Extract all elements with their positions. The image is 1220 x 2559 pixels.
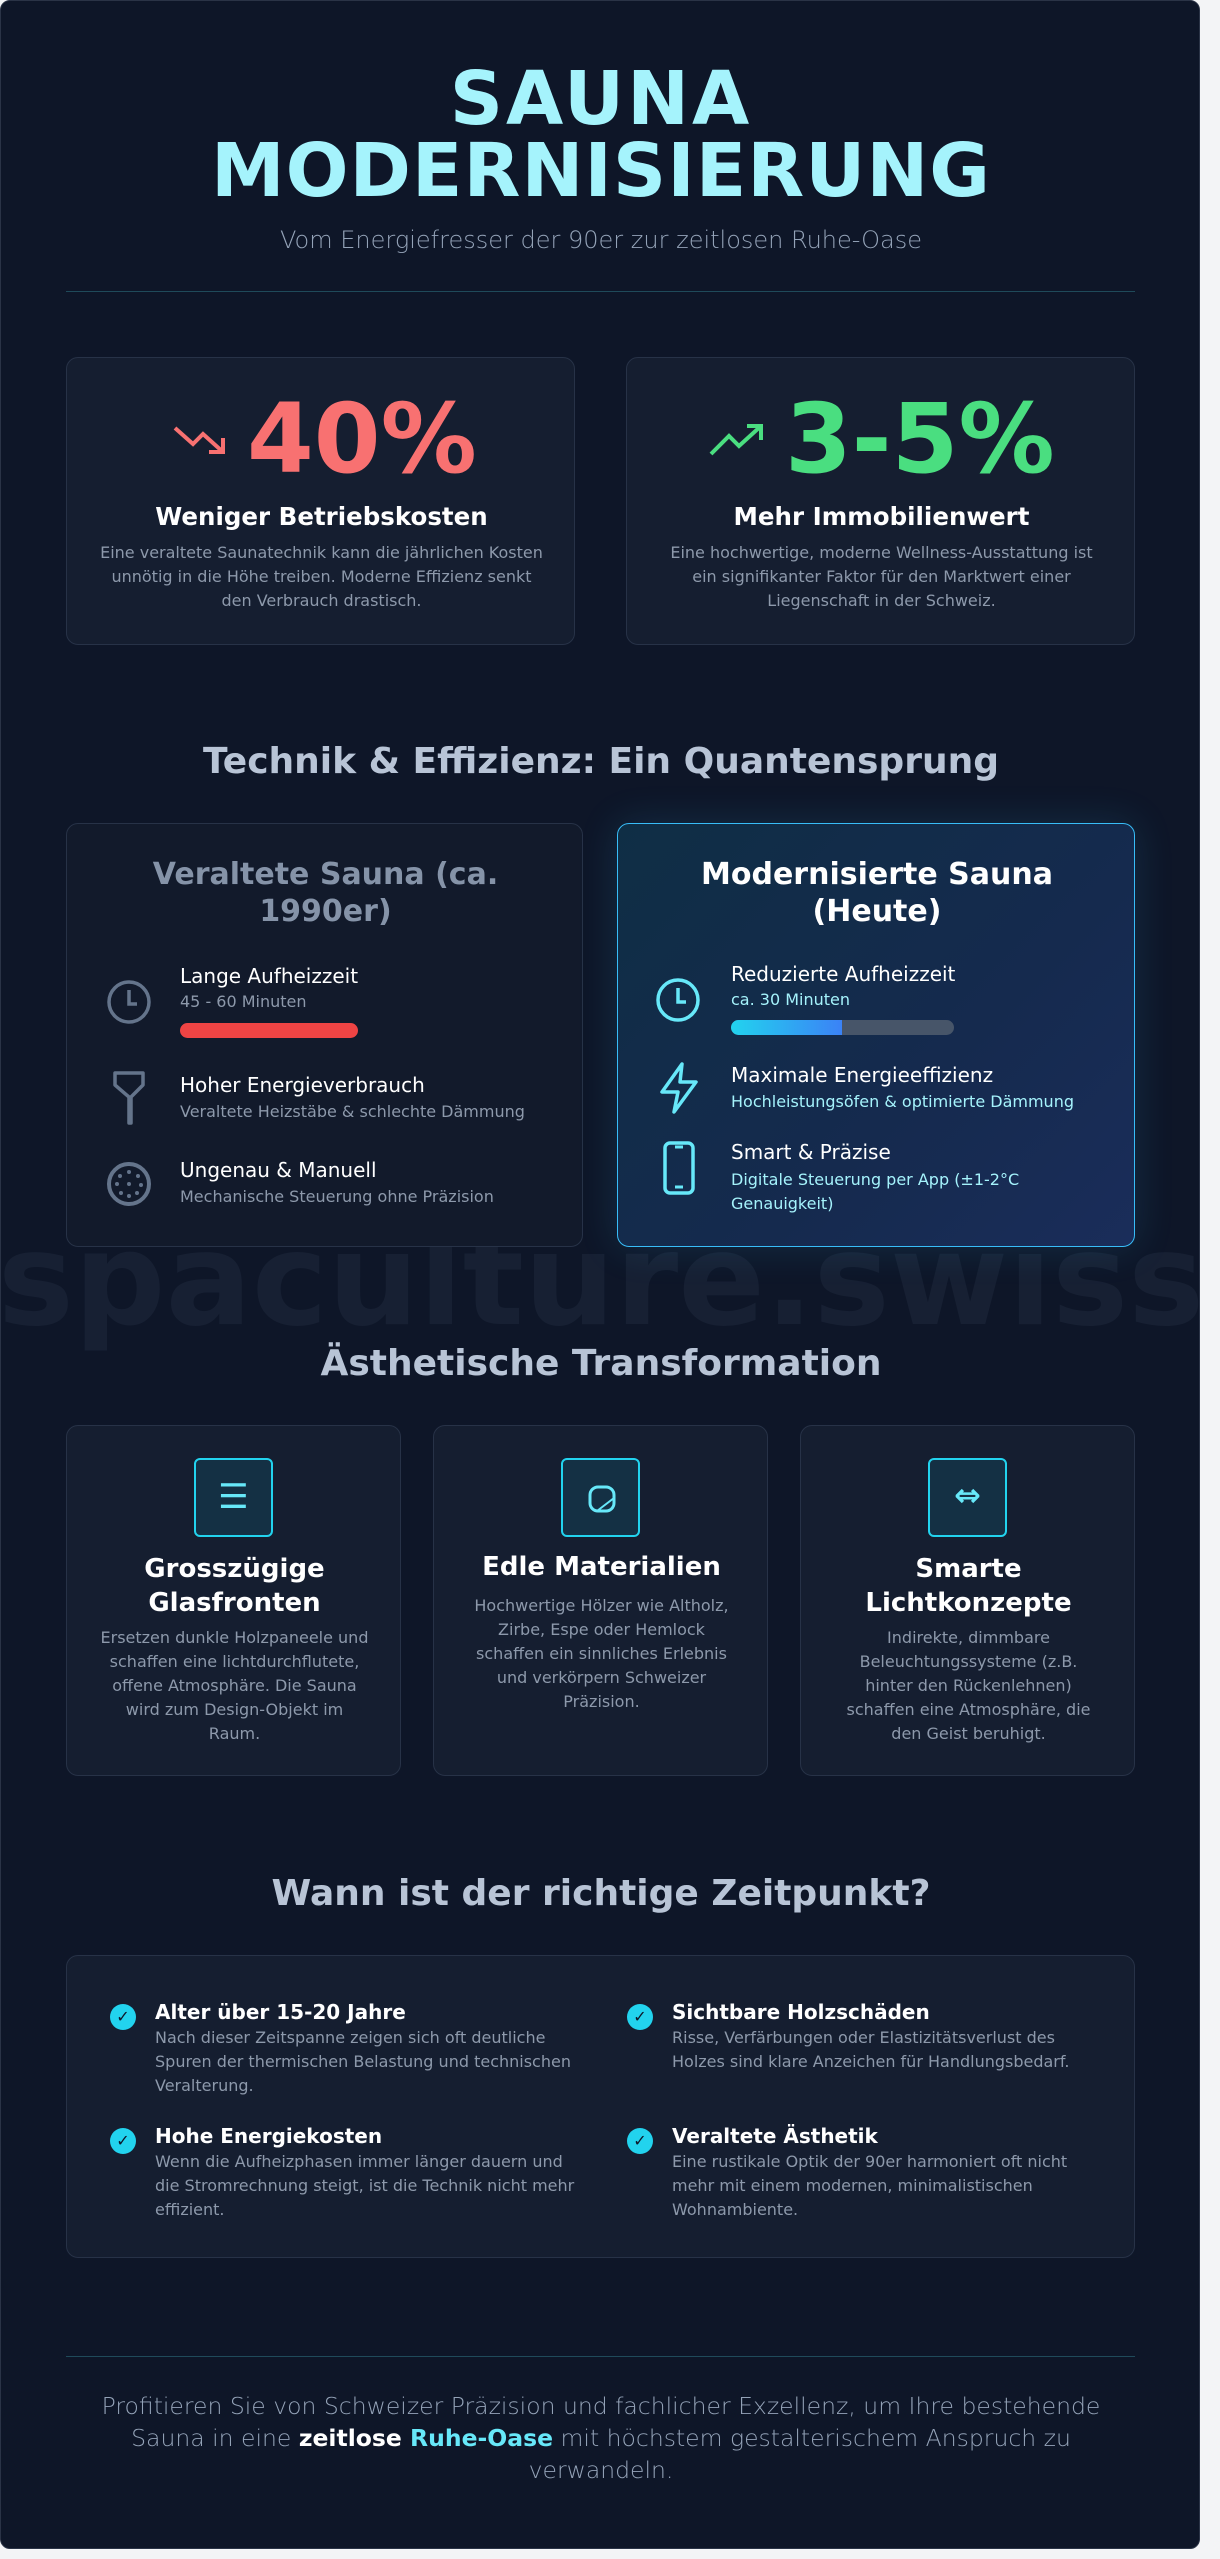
item: energy costs: Hohe Energiekosten bbox=[155, 2124, 382, 2148]
icon: glass: ☰ bbox=[218, 1477, 249, 1517]
heading: timing: Wann ist der richtige Zeitpunkt? bbox=[272, 1873, 930, 1914]
item: heating time bbox=[107, 964, 358, 1038]
card: light: Beleuchtungssysteme (z.B. bbox=[860, 1652, 1077, 1671]
text bbox=[100, 543, 543, 610]
item: aesthetics: Wohnambiente. bbox=[672, 2200, 798, 2219]
item: smart: Smart & Präzise bbox=[731, 1140, 891, 1164]
item: energy efficiency: Hochleistungsöfen & optimierte Dämmung bbox=[731, 1092, 1074, 1111]
title: (Heute) bbox=[813, 894, 941, 929]
item: heating time: Lange Aufheizzeit bbox=[180, 964, 358, 988]
card: light bbox=[800, 1425, 1135, 1776]
item: age: ✓ bbox=[116, 2007, 130, 2026]
item: heating time bbox=[656, 962, 955, 1035]
card: glass: Grosszügige bbox=[144, 1554, 325, 1584]
watermark: spaculture.swiss bbox=[0, 1206, 1200, 1355]
item: energy costs: die Stromrechnung steigt, ist die Technik nicht mehr bbox=[155, 2176, 574, 2195]
item: wood damage: ✓ bbox=[633, 2007, 647, 2026]
card: glass: Raum. bbox=[209, 1724, 260, 1743]
item: heating time: 45 - 60 Minuten bbox=[180, 992, 307, 1011]
item: manual: Mechanische Steuerung ohne Präzision bbox=[180, 1187, 494, 1206]
item: manual: Ungenau & Manuell bbox=[180, 1158, 377, 1182]
icon: trend up bbox=[710, 424, 763, 456]
card: glass: Glasfronten bbox=[148, 1588, 321, 1618]
item: wood damage: Holzes sind klare Anzeichen für Handlungsbedarf. bbox=[672, 2052, 1069, 2071]
card: glass: offene Atmosphäre. Die Sauna bbox=[112, 1676, 357, 1695]
card: materials: und verkörpern Schweizer bbox=[497, 1668, 706, 1687]
item: wood damage: Risse, Verfärbungen oder Elastizitätsverlust des bbox=[672, 2028, 1055, 2047]
item: heating time: Reduzierte Aufheizzeit bbox=[731, 962, 955, 986]
label: Mehr Immobilienwert bbox=[734, 502, 1029, 531]
card: materials: Zirbe, Espe oder Hemlock bbox=[498, 1620, 705, 1639]
big number: 40% bbox=[247, 383, 477, 495]
panel: modern sauna bbox=[617, 823, 1135, 1247]
card: materials: Hochwertige Hölzer wie Altholz, bbox=[474, 1596, 729, 1615]
item: smart: Digitale Steuerung per App (±1-2°C Genauigkeit) bbox=[731, 1170, 1019, 1213]
card: light: den Geist beruhigt. bbox=[891, 1724, 1046, 1743]
item: energy: Hoher Energieverbrauch bbox=[180, 1073, 425, 1097]
stat card: 3-5% bbox=[626, 357, 1135, 645]
icon: trend down bbox=[174, 426, 225, 454]
card: materials: Präzision. bbox=[563, 1692, 640, 1711]
item: energy costs: ✓ bbox=[116, 2131, 130, 2150]
stat card: 40% bbox=[66, 357, 575, 645]
title bbox=[153, 857, 498, 929]
item: manual bbox=[107, 1158, 494, 1206]
item: wood damage bbox=[627, 2000, 1069, 2071]
card: light: Lichtkonzepte bbox=[865, 1588, 1072, 1618]
card: glass: Ersetzen dunkle Holzpaneele und bbox=[101, 1628, 368, 1647]
title bbox=[211, 56, 991, 214]
icon: glass bbox=[194, 1458, 273, 1537]
item: energy: Veraltete Heizstäbe & schlechte Dämmung bbox=[180, 1102, 525, 1121]
card: materials bbox=[433, 1425, 768, 1776]
title: Modernisierte Sauna bbox=[701, 857, 1053, 892]
label: Weniger Betriebskosten bbox=[155, 502, 488, 531]
card: glass bbox=[66, 1425, 401, 1776]
text: Eine veraltete Saunatechnik kann die jährlichen Kosten bbox=[100, 543, 543, 562]
icon: leaf bbox=[561, 1458, 640, 1537]
item: energy efficiency: Maximale Energieeffizienz bbox=[731, 1063, 993, 1087]
icon: light bbox=[928, 1458, 1007, 1537]
text: ein signifikanter Faktor für den Marktwert einer bbox=[692, 567, 1071, 586]
card: light: hinter den Rückenlehnen) bbox=[865, 1676, 1072, 1695]
title: Veraltete Sauna (ca. bbox=[153, 857, 498, 892]
heading: technik: Technik & Effizienz: Ein Quantensprung bbox=[203, 741, 999, 782]
item: aesthetics bbox=[627, 2124, 1067, 2219]
item: energy efficiency bbox=[660, 1062, 1074, 1114]
card: light: schaffen eine Atmosphäre, die bbox=[847, 1700, 1090, 1719]
item: aesthetics: ✓ bbox=[633, 2131, 647, 2150]
item: energy bbox=[113, 1071, 525, 1125]
icon: light: ⇔ bbox=[954, 1476, 981, 1514]
item: aesthetics: Eine rustikale Optik der 90er harmoniert oft nicht bbox=[672, 2152, 1067, 2171]
title: SAUNA bbox=[450, 56, 752, 142]
footer text: Profitieren Sie von Schweizer Präzision und fachlicher Exzellenz, um Ihre bestehende Sauna in eine zeitlose Ruhe-Oase mit höchstem gestalterischem Anspruch zu verwandeln. bbox=[102, 2392, 1100, 2484]
heading: aesthetics: Ästhetische Transformation bbox=[320, 1343, 882, 1384]
card: glass: schaffen eine lichtdurchflutete, bbox=[110, 1652, 359, 1671]
text: Liegenschaft in der Schweiz. bbox=[767, 591, 996, 610]
text: den Verbrauch drastisch. bbox=[221, 591, 422, 610]
title: 1990er) bbox=[259, 894, 392, 929]
item: energy costs: effizient. bbox=[155, 2200, 224, 2219]
text: unnötig in die Höhe treiben. Moderne Effizienz senkt bbox=[111, 567, 532, 586]
item: smart bbox=[663, 1140, 1019, 1213]
item: age: Alter über 15-20 Jahre bbox=[155, 2000, 406, 2024]
item: energy costs bbox=[110, 2124, 574, 2219]
big number: 3-5% bbox=[785, 383, 1055, 495]
card: materials: Edle Materialien bbox=[482, 1552, 721, 1582]
item: age: Spuren der thermischen Belastung und technischen bbox=[155, 2052, 571, 2071]
card: light: Indirekte, dimmbare bbox=[887, 1628, 1050, 1647]
text bbox=[670, 543, 1093, 610]
title: MODERNISIERUNG bbox=[211, 128, 991, 214]
title bbox=[701, 857, 1053, 929]
card: materials: schaffen ein sinnliches Erlebnis bbox=[476, 1644, 727, 1663]
item: aesthetics: Veraltete Ästhetik bbox=[672, 2124, 878, 2148]
text: Eine hochwertige, moderne Wellness-Ausstattung ist bbox=[670, 543, 1093, 562]
card: light: Smarte bbox=[915, 1554, 1022, 1584]
item: wood damage: Sichtbare Holzschäden bbox=[672, 2000, 930, 2024]
card: glass: wird zum Design-Objekt im bbox=[126, 1700, 343, 1719]
item: heating time: ca. 30 Minuten bbox=[731, 990, 850, 1009]
panel: old sauna bbox=[66, 823, 583, 1247]
panel: checklist bbox=[66, 1955, 1135, 2258]
item: energy costs: Wenn die Aufheizphasen immer länger dauern und bbox=[155, 2152, 563, 2171]
item: age bbox=[110, 2000, 571, 2095]
item: aesthetics: mehr mit einem modernen, minimalistischen bbox=[672, 2176, 1033, 2195]
subtitle: Vom Energiefresser der 90er zur zeitlosen Ruhe-Oase bbox=[280, 226, 922, 254]
item: age: Veralterung. bbox=[155, 2076, 254, 2095]
item: age: Nach dieser Zeitspanne zeigen sich oft deutliche bbox=[155, 2028, 545, 2047]
